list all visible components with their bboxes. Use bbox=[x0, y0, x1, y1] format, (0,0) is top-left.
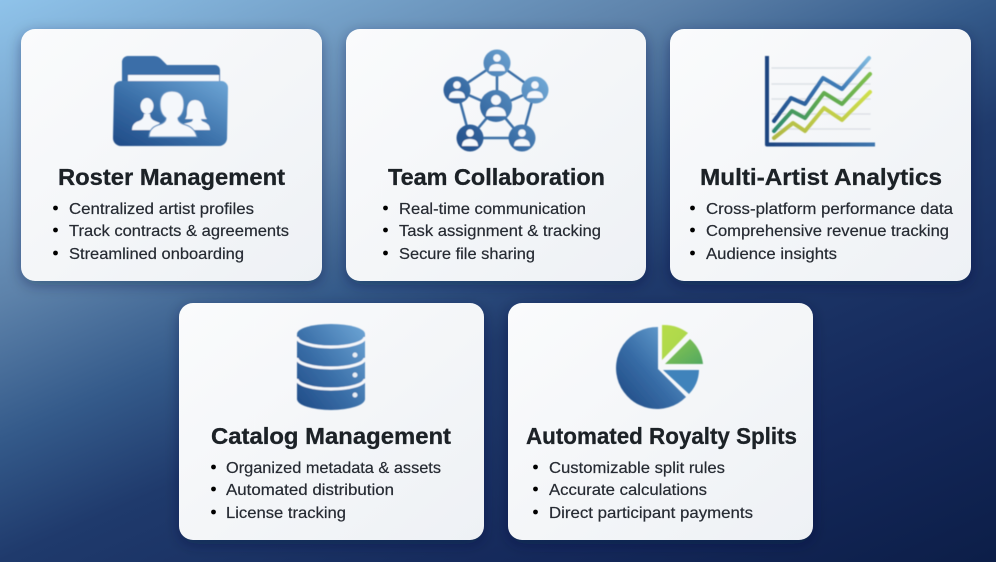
list: roster features: Streamlined onboarding bbox=[69, 246, 244, 263]
list: analytics features bbox=[690, 201, 953, 263]
list: catalog features: Automated distribution bbox=[226, 482, 394, 499]
list: roster features bbox=[53, 201, 289, 263]
heading: Roster Management: Roster Management bbox=[58, 164, 285, 190]
heading: Catalog Management: Catalog Management bbox=[211, 423, 451, 449]
list: catalog features: License tracking bbox=[226, 505, 346, 522]
icon: team network bbox=[444, 50, 548, 152]
list: analytics features: Comprehensive revenue tracking bbox=[706, 223, 949, 240]
list: analytics features: Audience insights bbox=[706, 246, 837, 263]
list: royalty features bbox=[533, 460, 753, 522]
panel: Catalog Management bbox=[179, 303, 484, 540]
icon: artist folder bbox=[113, 56, 228, 146]
icon: line chart bbox=[767, 56, 875, 144]
icon: pie chart bbox=[616, 325, 703, 409]
list: catalog features: Organized metadata & assets bbox=[226, 460, 441, 477]
list: royalty features: Accurate calculations bbox=[549, 482, 707, 499]
heading: Multi-Artist Analytics: Multi-Artist Analytics bbox=[700, 164, 942, 190]
list: roster features: Centralized artist profiles bbox=[69, 201, 254, 218]
list: collaboration features bbox=[383, 201, 601, 263]
icon: database bbox=[297, 324, 365, 410]
list: roster features: Track contracts & agreements bbox=[69, 223, 289, 240]
heading: Team Collaboration: Team Collaboration bbox=[388, 164, 605, 190]
list: collaboration features: Task assignment & tracking bbox=[399, 223, 601, 240]
panel: Automated Royalty Splits bbox=[508, 303, 813, 540]
list: collaboration features: Real-time communication bbox=[399, 201, 586, 218]
panel: Multi-Artist Analytics bbox=[670, 29, 971, 281]
heading: Automated Royalty Splits: Automated Royalty Splits bbox=[526, 423, 797, 449]
list: royalty features: Direct participant payments bbox=[549, 505, 753, 522]
list: analytics features: Cross-platform performance data bbox=[706, 201, 953, 218]
list: royalty features: Customizable split rules bbox=[549, 460, 725, 477]
list: catalog features bbox=[211, 460, 441, 522]
list: collaboration features: Secure file sharing bbox=[399, 246, 535, 263]
panel: Roster Management bbox=[21, 29, 322, 281]
panel: Team Collaboration bbox=[346, 29, 646, 281]
